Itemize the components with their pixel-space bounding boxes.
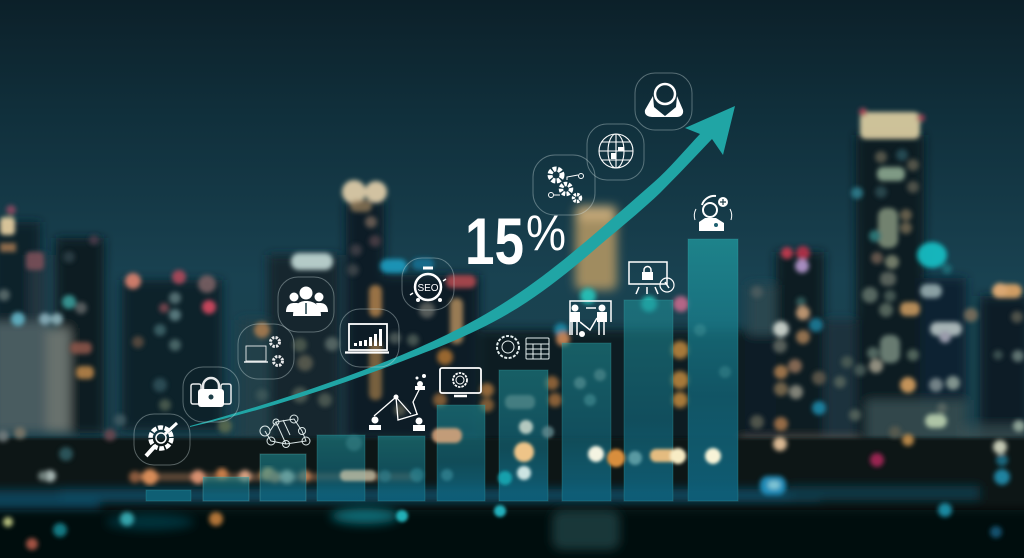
foreground dark band xyxy=(0,438,1024,558)
bar 3 xyxy=(260,454,306,501)
horizon glow lights xyxy=(129,467,420,485)
soft teal reflections xyxy=(106,508,620,550)
bar 10 xyxy=(688,239,738,501)
bar 8 xyxy=(562,343,611,501)
icon: laptop and gears xyxy=(238,324,294,379)
bar 4 xyxy=(317,435,365,501)
icon frames and icons xyxy=(134,73,692,465)
icon: alarm clock: SEO xyxy=(417,283,439,294)
icon: laptop with bar chart xyxy=(340,309,399,367)
bar 2 xyxy=(203,477,249,501)
icon: team xyxy=(278,277,334,332)
blurred city skyline xyxy=(0,135,1024,558)
headline: 15%: % xyxy=(526,205,566,261)
lights over bars xyxy=(340,324,731,522)
icon: padlock on devices xyxy=(183,367,239,422)
icon: monitor with gear xyxy=(440,368,481,396)
bar 5 xyxy=(378,436,425,501)
icon: network xyxy=(260,415,310,448)
bar 9 xyxy=(624,300,673,501)
growth arrow xyxy=(190,106,735,427)
icon: presenters at board xyxy=(570,301,611,337)
black foreground xyxy=(0,510,1024,558)
bar chart xyxy=(146,239,738,501)
icon: globe xyxy=(587,124,644,180)
bar 1 xyxy=(146,490,191,501)
icon: gear and calendar xyxy=(497,336,549,359)
icon: alarm clock xyxy=(402,258,454,310)
icon: target xyxy=(134,414,190,465)
blue water band xyxy=(0,486,980,514)
icon: linked gears xyxy=(533,155,595,215)
icon: healthcare agent xyxy=(694,196,732,231)
bokeh lights xyxy=(0,108,1024,550)
icon: support agent with headset xyxy=(635,73,692,130)
icon: secure presentation board xyxy=(629,262,674,294)
icon row above bars xyxy=(260,196,732,448)
bar 7 xyxy=(499,370,548,501)
headline: 15%: 15 xyxy=(465,204,524,278)
icon: connected people and molecule xyxy=(369,374,426,431)
bar 6 xyxy=(437,405,485,501)
